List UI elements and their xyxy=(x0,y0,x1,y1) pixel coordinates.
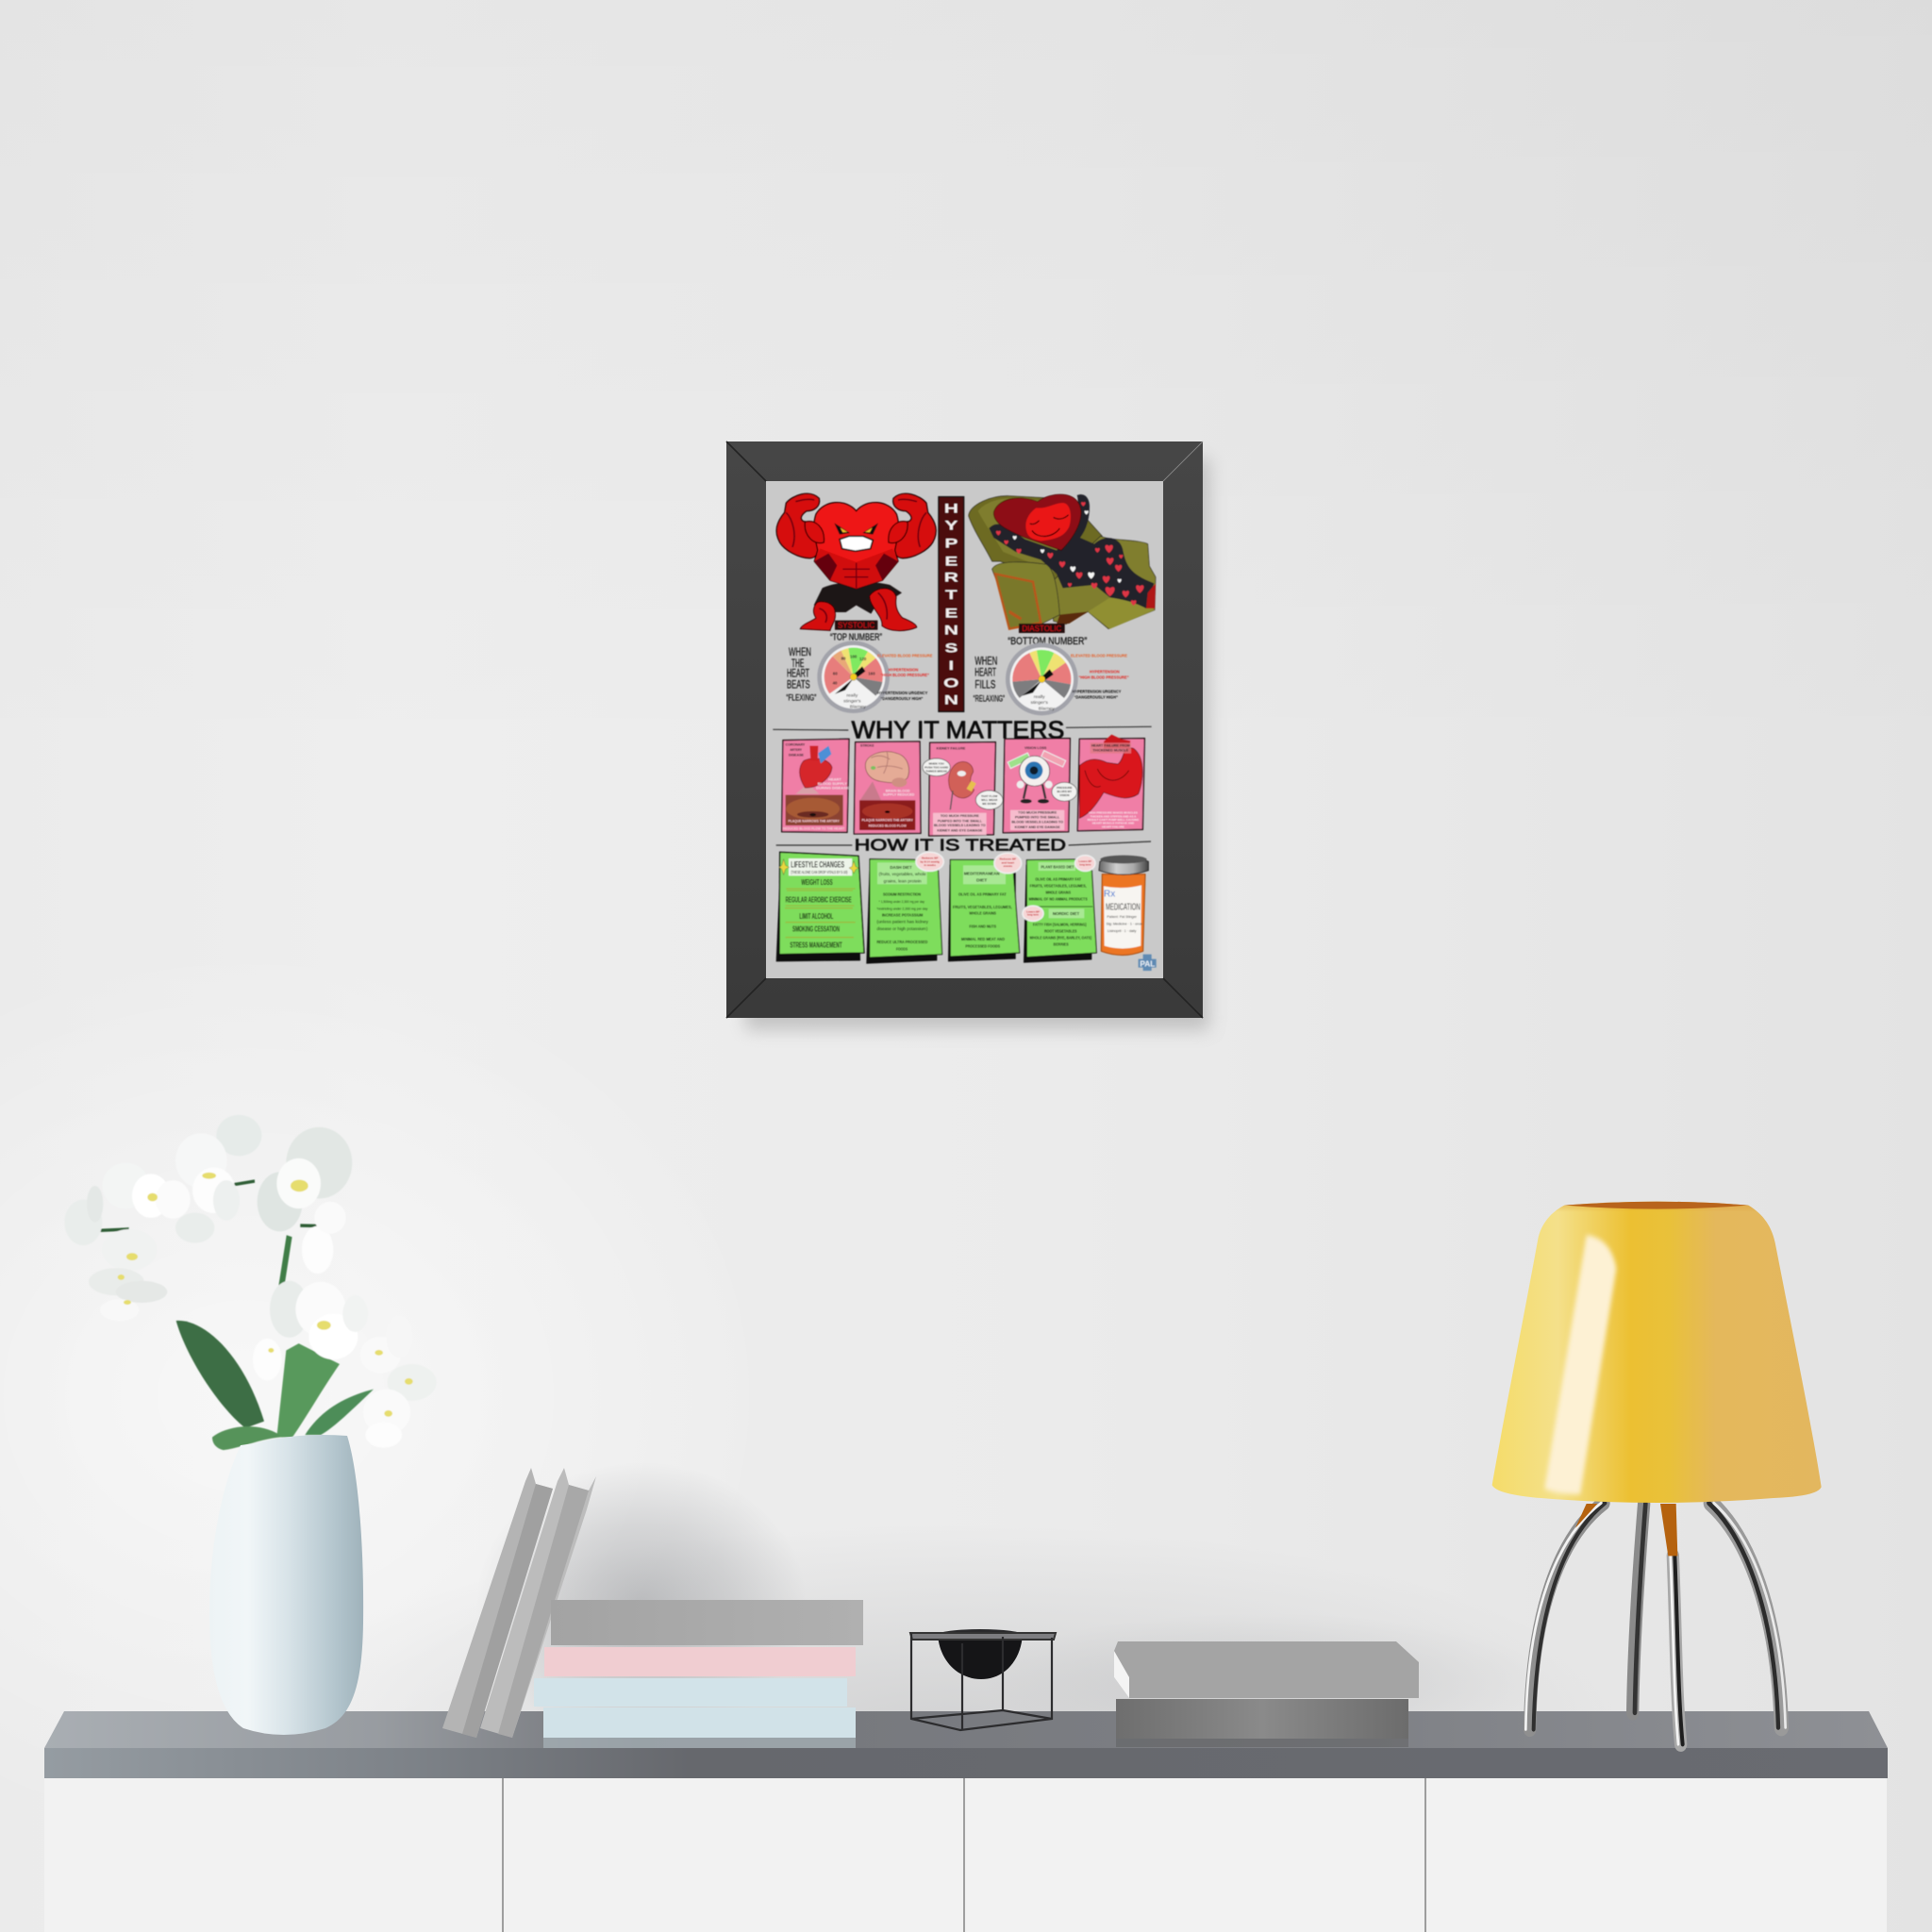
panel: mediterranean diet: FISH AND NUTS xyxy=(969,924,996,929)
card: coronary artery disease: ARTERY xyxy=(790,748,802,752)
panel: dash diet: REDUCE ULTRA PROCESSED xyxy=(876,940,928,945)
title banner: hypertension xyxy=(939,497,964,711)
speech bubble: PRESSURE xyxy=(1057,786,1073,790)
vase xyxy=(209,1435,363,1735)
orchid in vase xyxy=(64,1115,437,1735)
panel: mediterranean diet: FRUITS, VEGETABLES, LEGUMES, xyxy=(953,905,1012,909)
card: kidney failure: PUMPED INTO THE SMALL xyxy=(938,819,983,823)
panel: lifestyle changes: LIMIT ALCOHOL xyxy=(799,911,834,921)
panel: lifestyle changes xyxy=(776,852,864,961)
gauge labels: systolic xyxy=(877,654,932,701)
title banner: hypertension: E xyxy=(944,554,958,568)
panel: plant based and nordic diet: OLIVE OIL AS PRIMARY FAT xyxy=(1035,877,1081,882)
panel: dash diet: * 1,500mg under 2,300 mg per day xyxy=(879,899,924,904)
card: stroke: PLAQUE NARROWS THE ARTERY xyxy=(862,819,914,823)
panel: lifestyle changes: SMOKING CESSATION xyxy=(792,924,840,934)
card: heart failure: THICKEN AND STIFFEN AND AS A xyxy=(1091,814,1137,818)
card: vision loss: VISION LOSS xyxy=(1024,746,1047,750)
text: when heart fills relaxing: “RELAXING” xyxy=(974,693,1005,703)
panel: dash diet: disease or high potassium) xyxy=(876,926,928,932)
gauge labels: systolic: HYPERTENSION xyxy=(889,668,919,673)
gauge: systolic: really xyxy=(846,692,858,698)
label: systolic: SYSTOLIC xyxy=(838,621,874,630)
cloud callouts: Lowers BP xyxy=(1078,859,1091,863)
card: coronary artery disease: DURING DISEASE xyxy=(816,786,849,791)
gauge: diastolic: Blarney xyxy=(1039,706,1055,711)
card: stroke: STROKE xyxy=(860,744,874,748)
label: top number: “TOP NUMBER” xyxy=(830,632,882,642)
card: heart failure: HEART MUSCLE FATIGUE AND xyxy=(1092,822,1135,825)
cloud callouts: Lowers BP xyxy=(1026,909,1040,913)
gauge labels: diastolic: HYPERTENSION xyxy=(1090,669,1120,674)
illustration: medication bottle: MEDICATION xyxy=(1106,903,1141,913)
speech bubbles: WILL WEAR xyxy=(981,798,998,802)
panel: dash diet: grains, lean protein xyxy=(884,878,922,884)
card: kidney failure: TOO MUCH PRESSURE xyxy=(941,814,979,818)
illustration: flexing heart (systolic) xyxy=(776,493,936,631)
gauge: systolic: 120 xyxy=(859,657,867,661)
text: when heart fills relaxing: WHEN xyxy=(974,654,997,667)
text: when the heart beats flexing: “FLEXING” xyxy=(786,692,816,702)
why it matters section, zoom coordinates xyxy=(773,715,1152,836)
panel: plant based and nordic diet: BERRIES xyxy=(1054,942,1069,947)
gauge: systolic: 60 xyxy=(833,672,838,676)
panel: dash diet: DASH DIET xyxy=(890,865,912,871)
card: vision loss: BLOOD VESSELS LEADING TO xyxy=(1011,821,1063,824)
panel: dash diet: *restricting under 2,300 mg per day xyxy=(876,906,927,910)
panel: dash diet: (fruits, vegetables, whole xyxy=(879,872,926,877)
logo: PAL badge xyxy=(1139,955,1157,971)
heading: why it matters xyxy=(773,715,1152,743)
gauge labels: diastolic: HYPERTENSION URGENCY xyxy=(1073,689,1122,693)
gauge labels: systolic: “HIGH BLOOD PRESSURE” xyxy=(880,673,929,677)
lamp legs xyxy=(1525,1503,1786,1744)
card: stroke: SUPPLY REDUCED xyxy=(883,793,915,797)
title banner: hypertension: O xyxy=(943,675,959,690)
panel: mediterranean diet: WHOLE GRAINS xyxy=(969,911,996,916)
panel: dash diet: FOODS xyxy=(896,947,908,953)
cloud callouts: long term xyxy=(1027,913,1040,917)
panel: plant based and nordic diet: NORDIC DIET xyxy=(1053,911,1080,916)
cloud callouts: long term xyxy=(1079,862,1091,866)
gauge: diastolic: stinger's xyxy=(1030,700,1048,706)
card: coronary artery disease: CORONARY xyxy=(786,743,806,747)
books on the right xyxy=(1114,1641,1419,1747)
panel: lifestyle changes: STRESS MANAGEMENT xyxy=(790,940,842,949)
gauge labels: diastolic: “HIGH BLOOD PRESSURE” xyxy=(1078,675,1129,679)
panel: mediterranean diet: MEDITERRANEAN xyxy=(964,871,1000,876)
speech bubbles: THINGS BREAK xyxy=(925,770,948,774)
gauge: systolic xyxy=(817,641,890,713)
speech bubble xyxy=(1052,782,1077,801)
text: when the heart beats flexing: BEATS xyxy=(787,677,810,691)
label: diastolic: DIASTOLIC xyxy=(1022,624,1061,633)
heading: how it is treated xyxy=(776,835,1151,854)
framed poster xyxy=(726,441,1203,1018)
speech bubble: BLURS MY xyxy=(1058,790,1072,793)
frame xyxy=(726,441,1203,1018)
gauge: systolic: 40 xyxy=(833,681,838,686)
title banner: hypertension: P xyxy=(944,536,958,551)
gauge: systolic: 100 xyxy=(850,654,858,658)
poster frame shadow xyxy=(745,458,1209,1030)
panel: lifestyle changes: LIFESTYLE CHANGES xyxy=(791,859,844,869)
gauge labels: diastolic: ELEVATED BLOOD PRESSURE xyxy=(1071,654,1127,658)
panel: lifestyle changes: REGULAR AEROBIC EXERCISE xyxy=(786,894,852,904)
text: when the heart beats flexing xyxy=(786,645,816,702)
black bowl planter xyxy=(910,1629,1056,1730)
text: when the heart beats flexing: WHEN xyxy=(789,645,811,658)
panel: mediterranean diet xyxy=(948,853,1022,961)
text: when the heart beats flexing: HEART xyxy=(787,667,809,680)
card: coronary artery disease: HEART xyxy=(828,776,841,781)
speech bubbles: WHEN YOU xyxy=(928,762,944,766)
cloud callout: Reduces BP xyxy=(922,857,938,860)
gauge labels: systolic: ELEVATED BLOOD PRESSURE xyxy=(877,654,932,658)
speech bubbles xyxy=(923,758,1003,809)
speech bubbles: ME DOWN xyxy=(982,802,996,806)
panel: mediterranean diet: DIET xyxy=(976,878,987,884)
panel: dash diet: (unless patient has kidney xyxy=(876,920,928,925)
title banner: hypertension: Y xyxy=(944,518,958,533)
title banner: hypertension: R xyxy=(944,570,958,585)
card: stroke: REDUCED BLOOD FLOW xyxy=(869,824,908,828)
speech bubbles: THAT FLOW xyxy=(981,794,998,798)
card: heart failure: HEART FAILURE FROM xyxy=(1091,743,1130,747)
card: kidney failure xyxy=(923,742,1003,836)
cloud callout: Reduces BP xyxy=(1000,858,1016,861)
title banner: hypertension: E xyxy=(944,606,958,620)
yellow table lamp xyxy=(1492,1202,1822,1744)
shelf xyxy=(44,1711,1888,1778)
cloud callout: and heart xyxy=(1002,860,1014,864)
text: when heart fills relaxing: FILLS xyxy=(974,677,995,691)
title banner: hypertension: T xyxy=(945,587,958,602)
title banner: hypertension: N xyxy=(944,623,958,638)
card: coronary artery disease: DISEASE xyxy=(789,753,805,757)
sideboard cabinet xyxy=(44,1778,1887,1932)
label: bottom number: “BOTTOM NUMBER” xyxy=(1008,636,1087,647)
panel: plant based and nordic diet: FRUITS, VEGETABLES, LEGUMES, xyxy=(1030,883,1087,888)
title banner: hypertension: S xyxy=(944,641,958,656)
panel: plant based and nordic diet xyxy=(1023,856,1096,963)
panel: lifestyle changes: (THESE ALONE CAN DROP VITALS BY 5-10) xyxy=(791,870,848,874)
cloud callout: events xyxy=(1004,864,1012,868)
title banner: hypertension: I xyxy=(948,658,954,673)
illustration: medication bottle xyxy=(1099,856,1148,955)
gauge labels: diastolic xyxy=(1071,654,1129,700)
panel: plant based and nordic diet: PLANT BASED DIET xyxy=(1041,864,1074,869)
text: when heart fills relaxing xyxy=(974,654,1005,703)
stacked books xyxy=(534,1600,863,1748)
card: vision loss: KIDNEY AND EYE DAMAGE xyxy=(1015,825,1060,829)
card: stroke: BRAIN BLOOD xyxy=(886,789,910,792)
panel: plant based and nordic diet: MINIMAL OF NO ANIMAL PRODUCTS xyxy=(1029,896,1088,901)
gauge: systolic: 160 xyxy=(868,672,875,676)
how it is treated section, zoom coordinates xyxy=(776,835,1157,971)
title banner: hypertension: H xyxy=(944,501,958,515)
panel: dash diet: SODIUM RESTRICTION xyxy=(883,892,921,898)
gauge labels: systolic: “DANGEROUSLY HIGH” xyxy=(880,696,923,701)
card: coronary artery disease: PLAQUE NARROWS THE ARTERY xyxy=(789,819,841,823)
card: kidney failure: KIDNEY FAILURE xyxy=(937,746,966,750)
card: vision loss xyxy=(1003,739,1077,833)
panel: plant based and nordic diet: WHOLE GRAINS (RYE, BARLEY, OATS) xyxy=(1029,936,1092,941)
card: vision loss: PUMPED INTO THE SMALL xyxy=(1015,815,1060,819)
panel: dash diet xyxy=(866,852,943,964)
leaning books xyxy=(442,1468,596,1738)
heading: why it matters: WHY IT MATTERS xyxy=(852,715,1064,743)
gauge: systolic: stinger's xyxy=(843,698,861,704)
panel: mediterranean diet: OLIVE OIL AS PRIMARY FAT xyxy=(958,891,1007,896)
title banner: hypertension: N xyxy=(944,692,958,708)
text: when heart fills relaxing: HEART xyxy=(974,666,996,679)
card: kidney failure: KIDNEY AND EYE DAMAGE xyxy=(937,828,983,832)
panel: lifestyle changes: WEIGHT LOSS xyxy=(801,877,833,887)
gauge labels: systolic: HYPERTENSION URGENCY xyxy=(877,691,928,695)
lamp shade xyxy=(1492,1202,1822,1503)
card: coronary artery disease: BLOOD SUPPLY xyxy=(818,781,847,786)
card: heart failure: HIGH PRESSURE MAKES MUSCLES xyxy=(1089,811,1138,815)
panel: mediterranean diet: PROCESSED FOODS xyxy=(965,943,1000,948)
card: vision loss: TOO MUCH PRESSURE xyxy=(1018,811,1058,815)
panel: mediterranean diet: MINIMAL RED MEAT AND xyxy=(961,937,1005,941)
illustration: relaxing heart in recliner (diastolic) xyxy=(969,494,1156,630)
card: heart failure: RESULT CAN'T PUMP WELL CAUSING xyxy=(1088,818,1140,822)
illustration: medication bottle: Sig: Medicine · 1 · once xyxy=(1107,923,1142,926)
panel: plant based and nordic diet: FATTY FISH (SALMON, HERRING) xyxy=(1033,923,1087,927)
gauge labels: diastolic: “DANGEROUSLY HIGH” xyxy=(1074,695,1118,700)
card: heart failure xyxy=(1077,735,1144,831)
gauge: diastolic: really xyxy=(1034,694,1045,700)
card: stroke xyxy=(854,741,921,834)
gauge: systolic: 80 xyxy=(841,656,846,660)
card: coronary artery disease xyxy=(782,739,849,832)
heading: how it is treated: HOW IT IS TREATED xyxy=(855,835,1066,854)
panel: plant based and nordic diet: WHOLE GRAINS xyxy=(1045,890,1071,894)
illustration: medication bottle: Patient: Pat Stinger xyxy=(1107,915,1138,919)
cloud callout xyxy=(994,853,1022,874)
speech bubble: VISION xyxy=(1059,793,1069,797)
speech bubbles: PUSH TOO HARD xyxy=(924,766,949,770)
illustration: medication bottle: Lisinopril · 1 · daily xyxy=(1108,929,1137,933)
lamp highlight xyxy=(1544,1235,1616,1494)
gauge: diastolic xyxy=(1006,643,1078,715)
cloud callout xyxy=(916,852,943,871)
illustration: medication bottle: Rx xyxy=(1104,890,1115,900)
card: heart failure: HEART FAILURE xyxy=(1102,824,1124,828)
card: heart failure: THICKENED MUSCLE xyxy=(1092,749,1129,753)
logo: PAL badge: PAL xyxy=(1140,958,1156,968)
panel: plant based and nordic diet: ROOT VEGETABLES xyxy=(1044,929,1077,934)
cloud callout: by 8-14 mmHg xyxy=(920,859,940,863)
orchid flowers and leaves xyxy=(64,1115,437,1450)
upper poster art, zoom coordinates xyxy=(776,493,1156,715)
panel: dash diet: INCREASE POTASSIUM xyxy=(882,912,923,918)
cloud callouts xyxy=(1023,856,1095,921)
cloud callout: in weeks xyxy=(924,863,936,867)
text: when the heart beats flexing: THE xyxy=(791,657,804,670)
card: coronary artery disease: REDUCED BLOOD FLOW TO THE HEART xyxy=(783,826,844,830)
card: kidney failure: BLOOD VESSELS LEADING TO xyxy=(934,824,986,827)
gauge: systolic: Blarney xyxy=(850,704,866,709)
